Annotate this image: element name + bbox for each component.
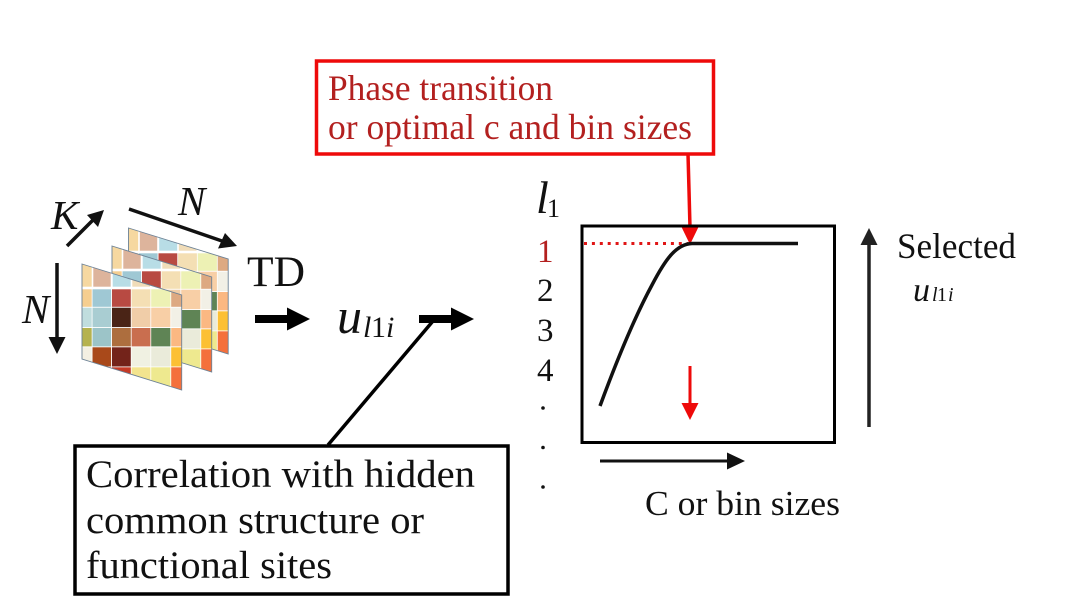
- arrow: x axis: [600, 452, 745, 470]
- label: small u l1 i: i: [948, 284, 954, 306]
- connector: correlation box to arrow: [328, 321, 433, 445]
- list: l1 indices: 1: [537, 234, 554, 270]
- label: large u l1 i: [337, 288, 394, 344]
- label: large u l1 i: 1: [371, 311, 386, 344]
- list: l1 indices: 4: [537, 353, 554, 389]
- list: l1 indices: [537, 234, 554, 489]
- label: selected: Selected: [897, 226, 1016, 266]
- label: top N axis: N: [177, 178, 208, 224]
- arrow: phase transition pointer: [682, 154, 698, 244]
- label: large u l1 i: u: [337, 288, 362, 344]
- arrow: u output: [419, 308, 474, 330]
- label: large u l1 i: i: [386, 311, 394, 344]
- callout: phase transition: or optimal c and bin sizes: [328, 107, 692, 147]
- arrow: left N axis: [48, 263, 66, 354]
- label: TD: TD: [247, 249, 305, 296]
- chart: saturation curve: [582, 226, 834, 442]
- label: small u l1 i: [913, 272, 954, 309]
- tensor stack illustration: [82, 224, 228, 391]
- arrow: top N axis: [129, 209, 237, 248]
- label: left N axis: N: [21, 286, 52, 332]
- callout: correlation: Correlation with hidden: [86, 452, 475, 496]
- label: l1 heading: l: [536, 172, 549, 223]
- label: l1 heading: 1: [547, 194, 560, 223]
- callout: correlation: functional sites: [86, 543, 332, 587]
- label: l1 heading: [536, 172, 560, 223]
- callout: correlation: [75, 446, 508, 594]
- callout: correlation: common structure or: [86, 498, 424, 542]
- arrow: selected up: [860, 228, 878, 427]
- list: l1 indices: 3: [537, 313, 554, 349]
- arrow: K axis: [67, 210, 104, 246]
- arrow: red downward: [682, 366, 698, 420]
- label: K axis: K: [50, 192, 81, 238]
- label: large u l1 i: l: [363, 311, 371, 344]
- callout: phase transition: Phase transition: [328, 68, 553, 108]
- arrow: TD output: [255, 308, 310, 330]
- callout: phase transition: [316, 61, 714, 154]
- label: x axis: C or bin sizes: [645, 484, 840, 523]
- label: small u l1 i: u: [913, 272, 930, 309]
- list: l1 indices: 2: [537, 273, 554, 309]
- label: small u l1 i: l: [932, 284, 938, 306]
- label: small u l1 i: 1: [937, 284, 947, 306]
